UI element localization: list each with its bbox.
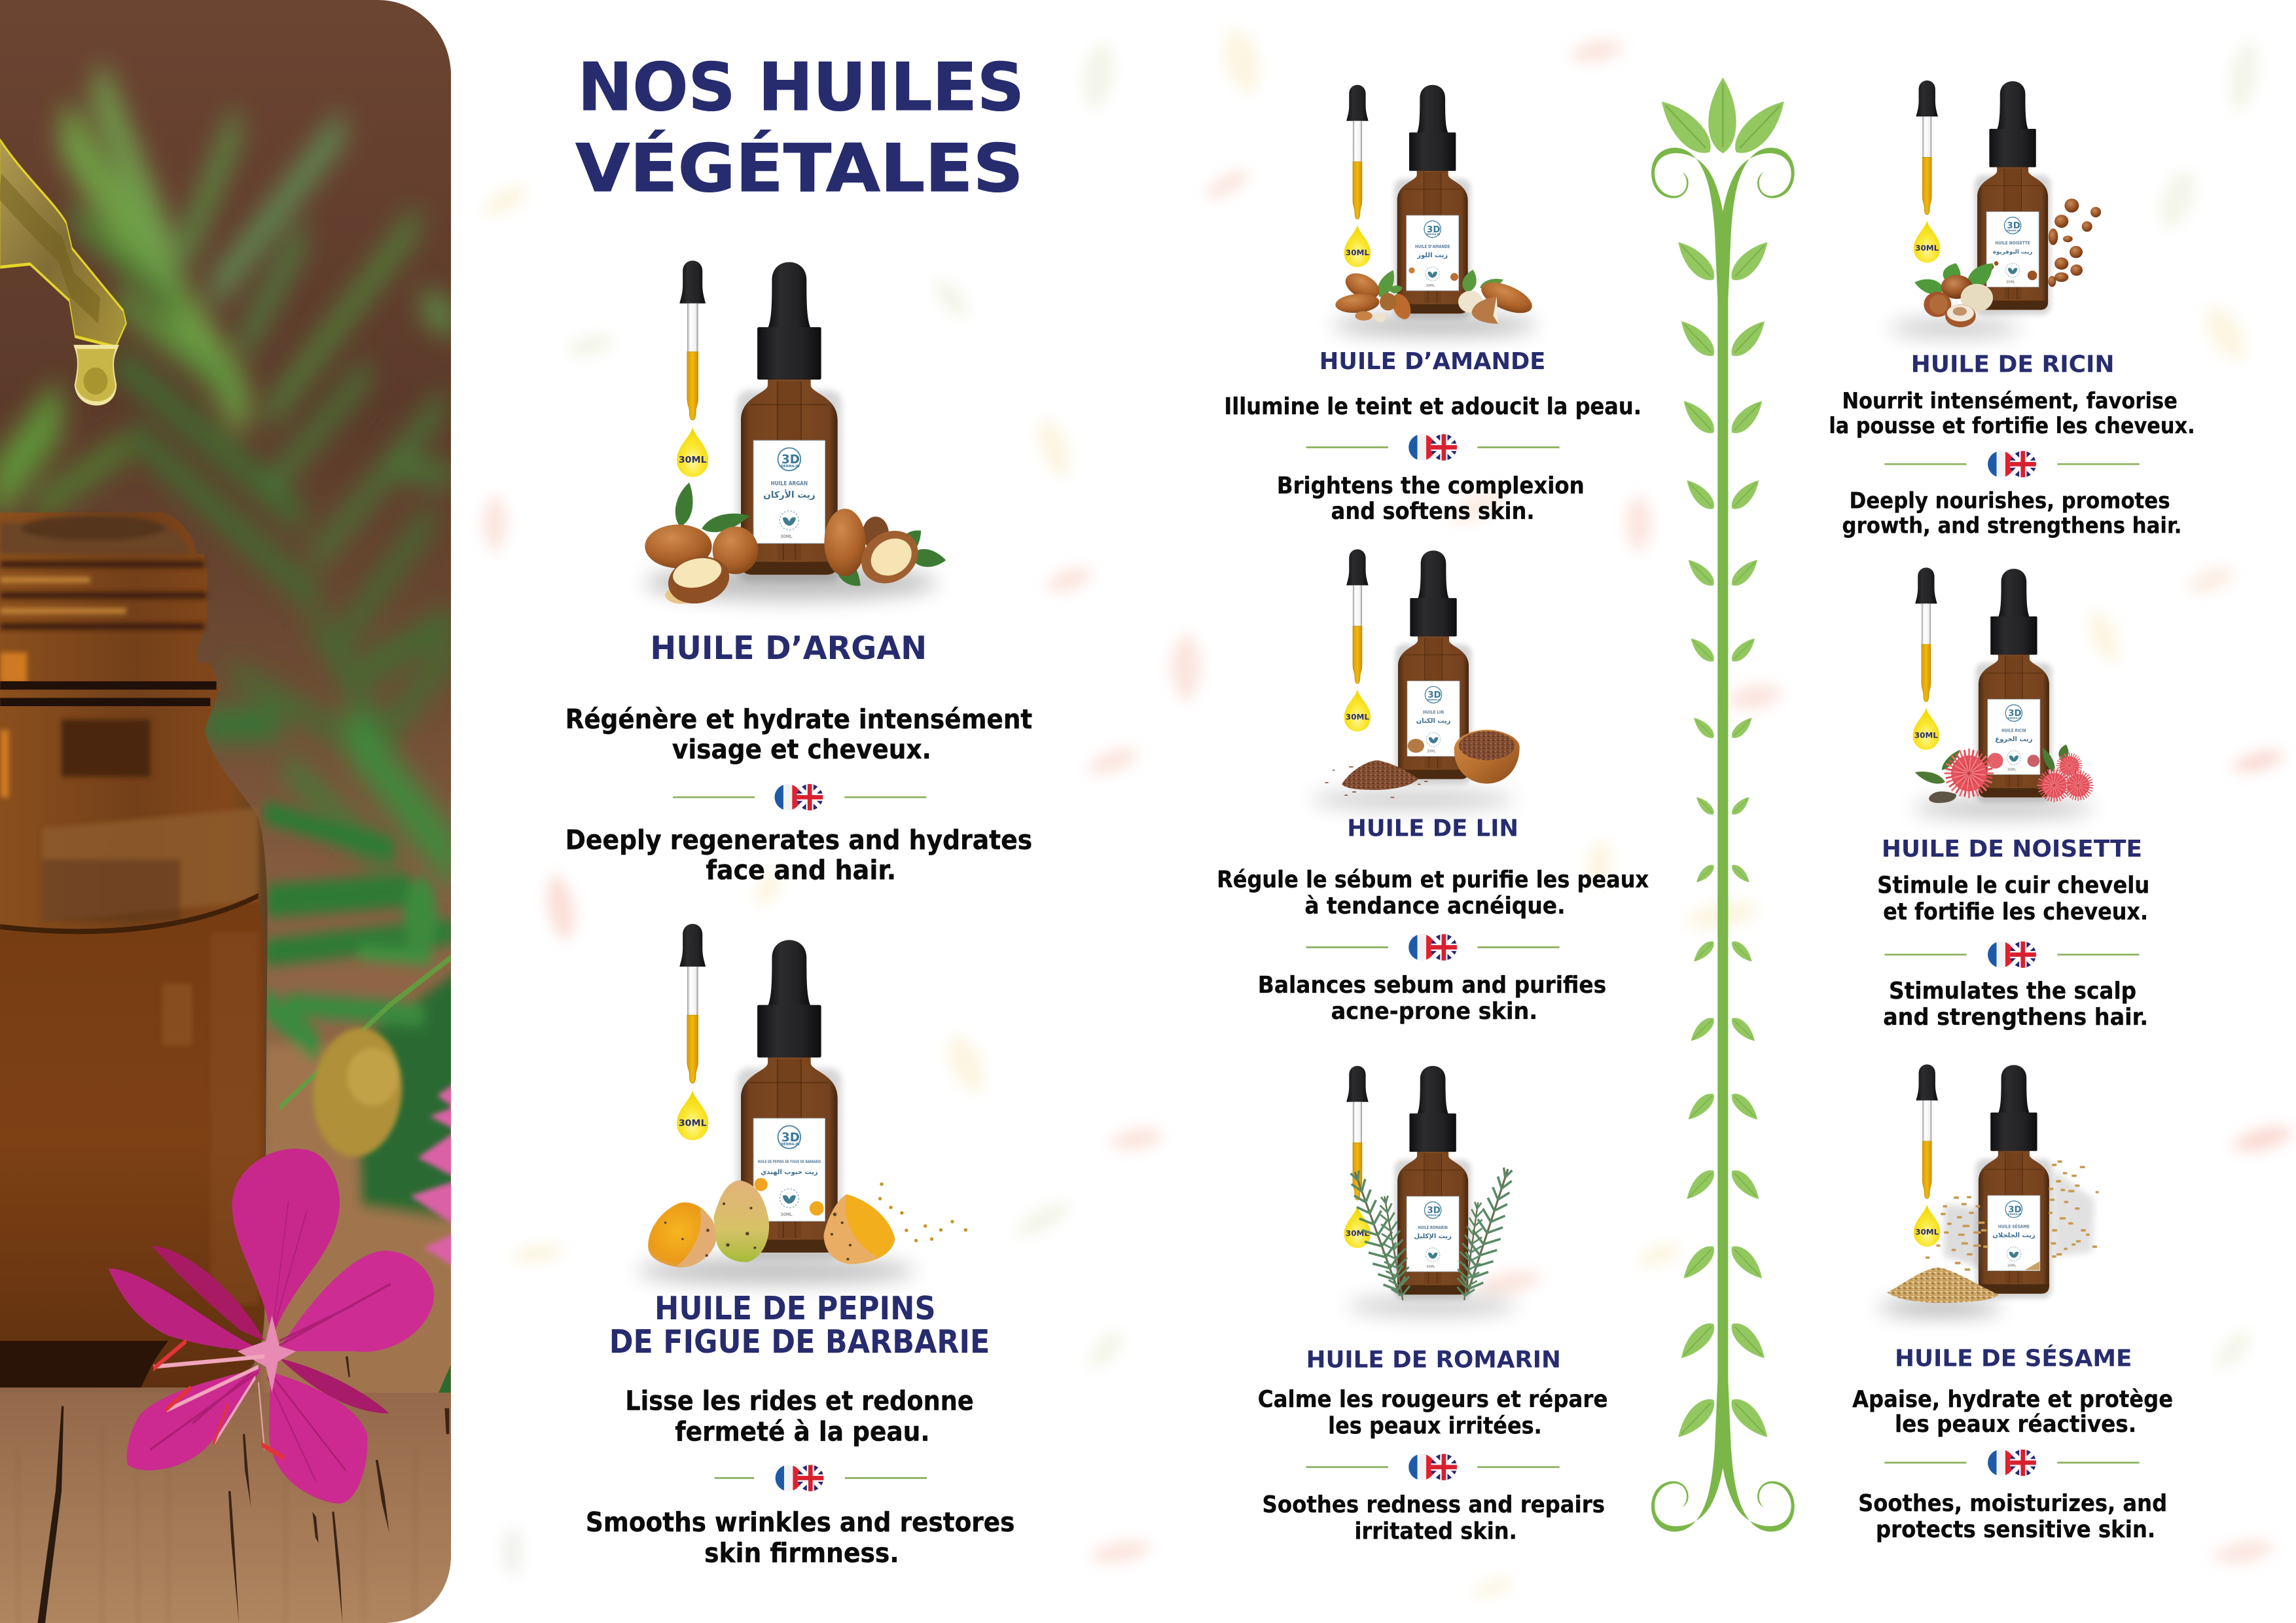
product: prickly pear oil bottle and dropper: زيت حبوب الهندي bbox=[761, 1169, 818, 1176]
english description: protects sensitive skin. bbox=[1876, 1516, 2155, 1543]
product: linseed oil bottle and dropper: 30ML bbox=[1346, 712, 1369, 721]
panel: huile de ricin bbox=[1829, 80, 2195, 538]
product: rosemary oil bottle and dropper: 30ML bbox=[1346, 1229, 1369, 1238]
product: linseed oil bottle and dropper bbox=[1310, 549, 1520, 808]
pink geranium flower bbox=[108, 1149, 434, 1504]
english description: Deeply nourishes, promotes bbox=[1850, 488, 2170, 513]
english description: Brightens the complexion bbox=[1277, 473, 1585, 499]
product: rosemary oil bottle and dropper: 3D bbox=[1427, 1206, 1441, 1216]
product: argan oil bottle and dropper: DERMA-IN bbox=[781, 465, 800, 469]
heading: HUILE DE RICIN bbox=[1911, 351, 2115, 378]
product: bottle and dropper with hazelnuts: 3D bbox=[2007, 221, 2020, 231]
product: almond oil bottle and dropper: 30ML bbox=[1426, 284, 1435, 288]
glass dropper with falling oil drop bbox=[0, 140, 126, 403]
language divider with flags bbox=[673, 783, 927, 812]
english description: irritated skin. bbox=[1354, 1518, 1517, 1544]
heading: HUILE DE NOISETTE bbox=[1882, 836, 2142, 863]
product: sesame oil bottle and dropper: HUILE SÉSAME bbox=[1998, 1224, 2030, 1230]
product: almond oil bottle and dropper: زيت اللوز bbox=[1416, 252, 1448, 259]
english description: acne-prone skin. bbox=[1331, 998, 1537, 1025]
language divider with flags bbox=[1306, 933, 1560, 962]
blurred rosemary foliage bbox=[0, 93, 451, 870]
product: argan oil bottle and dropper: زيت الأركان bbox=[763, 489, 816, 500]
english description: skin firmness. bbox=[704, 1537, 899, 1569]
title: VÉGÉTALES bbox=[575, 129, 1024, 207]
french description: Régénère et hydrate intensément bbox=[565, 704, 1032, 735]
panel: huile de romarin bbox=[1258, 1066, 1607, 1544]
product: bottle and dropper with castor flowers: DERMA-IN bbox=[2008, 717, 2021, 720]
product: prickly pear oil bottle and dropper: 30ML bbox=[679, 1119, 707, 1129]
amber glass bottle bbox=[0, 512, 268, 1387]
english description bbox=[1258, 972, 1606, 1025]
product: rosemary oil bottle and dropper: 30ML bbox=[1426, 1265, 1435, 1269]
product: bottle and dropper with hazelnuts: 30ML bbox=[1915, 243, 1939, 253]
french description bbox=[1829, 388, 2195, 438]
product: rosemary oil bottle and dropper: HUILE ROMARIN bbox=[1418, 1225, 1448, 1230]
product: bottle and dropper with hazelnuts bbox=[1889, 80, 2101, 337]
decorative central vine bbox=[1651, 77, 1795, 1531]
product: sesame oil bottle and dropper: DERMA-IN bbox=[2008, 1213, 2021, 1216]
english description bbox=[1263, 1491, 1605, 1544]
product: argan oil bottle and dropper: 30ML bbox=[780, 534, 793, 539]
english description: Deeply regenerates and hydrates bbox=[565, 825, 1032, 856]
product: linseed oil bottle and dropper: DERMA-IN bbox=[1427, 699, 1441, 702]
heading: DE FIGUE DE BARBARIE bbox=[609, 1323, 990, 1361]
language divider with flags bbox=[1884, 940, 2140, 969]
french description: la pousse et fortifie les cheveux. bbox=[1829, 413, 2195, 438]
english description: Balances sebum and purifies bbox=[1258, 972, 1606, 999]
english description: Soothes redness and repairs bbox=[1263, 1491, 1605, 1518]
french description: Calme les rougeurs et répare bbox=[1258, 1386, 1607, 1413]
product: rosemary oil bottle and dropper: زيت الإكليل bbox=[1414, 1233, 1452, 1240]
french description bbox=[1258, 1386, 1607, 1439]
french description: les peaux réactives. bbox=[1895, 1411, 2136, 1438]
heading: HUILE DE ROMARIN bbox=[1306, 1347, 1561, 1374]
french description bbox=[1877, 872, 2149, 925]
english description bbox=[565, 825, 1032, 885]
product: almond oil bottle and dropper: 3D bbox=[1427, 225, 1440, 235]
heading: HUILE DE LIN bbox=[1347, 815, 1518, 842]
title: NOS HUILES bbox=[578, 49, 1024, 126]
french description: Stimule le cuir chevelu bbox=[1877, 872, 2149, 899]
english description bbox=[1842, 488, 2181, 538]
english description: face and hair. bbox=[706, 854, 896, 885]
product: argan oil bottle and dropper: 3D bbox=[781, 453, 800, 467]
product: sesame oil bottle and dropper: زيت الجلجلان bbox=[1992, 1232, 2036, 1240]
product: argan oil bottle and dropper: 30ML bbox=[679, 455, 707, 465]
english description: and strengthens hair. bbox=[1883, 1004, 2148, 1031]
product: prickly pear oil bottle and dropper: 3D bbox=[781, 1131, 800, 1145]
product: bottle and dropper with castor flowers: 3D bbox=[2008, 709, 2022, 719]
product: prickly pear oil bottle and dropper: 30ML bbox=[780, 1212, 793, 1217]
french description bbox=[565, 704, 1032, 765]
product: bottle and dropper with castor flowers: HUILE RICIN bbox=[2001, 728, 2026, 734]
product: bottle and dropper with castor flowers bbox=[1912, 567, 2096, 817]
french description: fermeté à la peau. bbox=[675, 1416, 930, 1447]
french description: Régule le sébum et purifie les peaux bbox=[1217, 866, 1649, 893]
language divider with flags bbox=[1306, 433, 1560, 462]
heading bbox=[609, 1289, 990, 1361]
french description: Nourrit intensément, favorise bbox=[1842, 388, 2178, 414]
product: bottle and dropper with castor flowers: 30ML bbox=[2007, 768, 2017, 772]
product: argan oil bottle and dropper bbox=[644, 260, 946, 608]
language divider with flags bbox=[715, 1463, 927, 1493]
french description: Illumine le teint et adoucit la peau. bbox=[1224, 393, 1641, 420]
heading: HUILE DE SÉSAME bbox=[1895, 1344, 2132, 1372]
product: bottle and dropper with castor flowers: 30ML bbox=[1914, 730, 1938, 740]
french description: Lisse les rides et redonne bbox=[625, 1385, 974, 1416]
product: almond oil bottle and dropper: 30ML bbox=[1346, 248, 1369, 257]
french description bbox=[1217, 866, 1649, 919]
product: bottle and dropper with castor flowers: زيت الخروع bbox=[1995, 736, 2033, 743]
heading: HUILE D’AMANDE bbox=[1319, 348, 1545, 375]
french description: et fortifie les cheveux. bbox=[1883, 899, 2148, 925]
panel: huile d'amande bbox=[1224, 85, 1641, 525]
french description: à tendance acnéique. bbox=[1304, 893, 1566, 919]
product: sesame oil bottle and dropper: 3D bbox=[2008, 1205, 2022, 1215]
english description: Smooths wrinkles and restores bbox=[586, 1507, 1014, 1538]
french description bbox=[625, 1385, 974, 1447]
panel: huile d'argan bbox=[565, 260, 1032, 885]
product: linseed oil bottle and dropper: زيت الكتان bbox=[1416, 718, 1451, 725]
table and lower leaves behind the bottle bbox=[264, 813, 469, 1408]
heading: HUILE DE PEPINS bbox=[655, 1289, 936, 1327]
language divider with flags bbox=[1884, 1448, 2140, 1477]
product: argan oil bottle and dropper: HUILE ARGAN bbox=[771, 480, 808, 487]
english description: and softens skin. bbox=[1331, 498, 1535, 525]
product: bottle and dropper with hazelnuts: HUILE NOISETTE bbox=[1995, 241, 2030, 246]
panel: huile de lin bbox=[1217, 549, 1649, 1025]
english description: Soothes, moisturizes, and bbox=[1858, 1490, 2167, 1517]
wooden table bbox=[0, 1357, 451, 1623]
language divider with flags bbox=[1306, 1452, 1560, 1482]
product: bottle and dropper with hazelnuts: 30ML bbox=[2006, 281, 2015, 285]
product: prickly pear oil bottle and dropper: DERMA-IN bbox=[781, 1143, 800, 1147]
product: linseed oil bottle and dropper: HUILE LIN bbox=[1423, 710, 1444, 715]
english description bbox=[1883, 978, 2148, 1031]
product: sesame oil bottle and dropper: 30ML bbox=[1915, 1227, 1939, 1236]
panel: huile de noisette bbox=[1877, 567, 2149, 1031]
english description: growth, and strengthens hair. bbox=[1842, 512, 2181, 538]
product: linseed oil bottle and dropper: 30ML bbox=[1427, 750, 1436, 754]
product: prickly pear oil bottle and dropper bbox=[637, 924, 965, 1284]
yellow flower bud bbox=[312, 1023, 403, 1162]
french description: visage et cheveux. bbox=[672, 734, 931, 765]
heading: HUILE D’ARGAN bbox=[650, 629, 927, 667]
product: rosemary oil bottle and dropper bbox=[1341, 1066, 1522, 1315]
product: sesame oil bottle and dropper: 30ML bbox=[2007, 1264, 2017, 1268]
pink blossom behind bbox=[410, 1082, 457, 1268]
product: bottle and dropper with hazelnuts: DERMA-IN bbox=[2007, 230, 2020, 232]
faint floating petals background bbox=[477, 23, 2296, 1602]
panel: huile de sesame bbox=[1852, 1064, 2173, 1543]
french description bbox=[1852, 1386, 2173, 1438]
product: almond oil bottle and dropper: DERMA-IN bbox=[1426, 233, 1440, 236]
english description bbox=[1858, 1490, 2167, 1543]
product: almond oil bottle and dropper: HUILE D’AMANDE bbox=[1415, 244, 1450, 249]
language divider with flags bbox=[1884, 450, 2140, 479]
panel: huile de pepins de figue de barbarie bbox=[586, 924, 1014, 1569]
product: linseed oil bottle and dropper: 3D bbox=[1427, 690, 1441, 700]
product: sesame oil bottle and dropper bbox=[1878, 1064, 2098, 1315]
product: prickly pear oil bottle and dropper: HUILE DE PEPINS DE FIGUE DE BARBARIE bbox=[758, 1159, 821, 1164]
product: almond oil bottle and dropper bbox=[1333, 85, 1537, 335]
english description bbox=[1277, 473, 1585, 525]
english description bbox=[586, 1507, 1014, 1569]
title bbox=[575, 49, 1024, 207]
product: rosemary oil bottle and dropper: DERMA-IN bbox=[1427, 1214, 1441, 1217]
product: bottle and dropper with hazelnuts: زيت البوفريوة bbox=[1993, 249, 2032, 256]
french description: Apaise, hydrate et protège bbox=[1852, 1386, 2173, 1413]
french description: les peaux irritées. bbox=[1328, 1412, 1542, 1439]
panel: photo of amber bottle, dropper and pink flower bbox=[0, 0, 469, 1623]
english description: Stimulates the scalp bbox=[1889, 978, 2136, 1005]
